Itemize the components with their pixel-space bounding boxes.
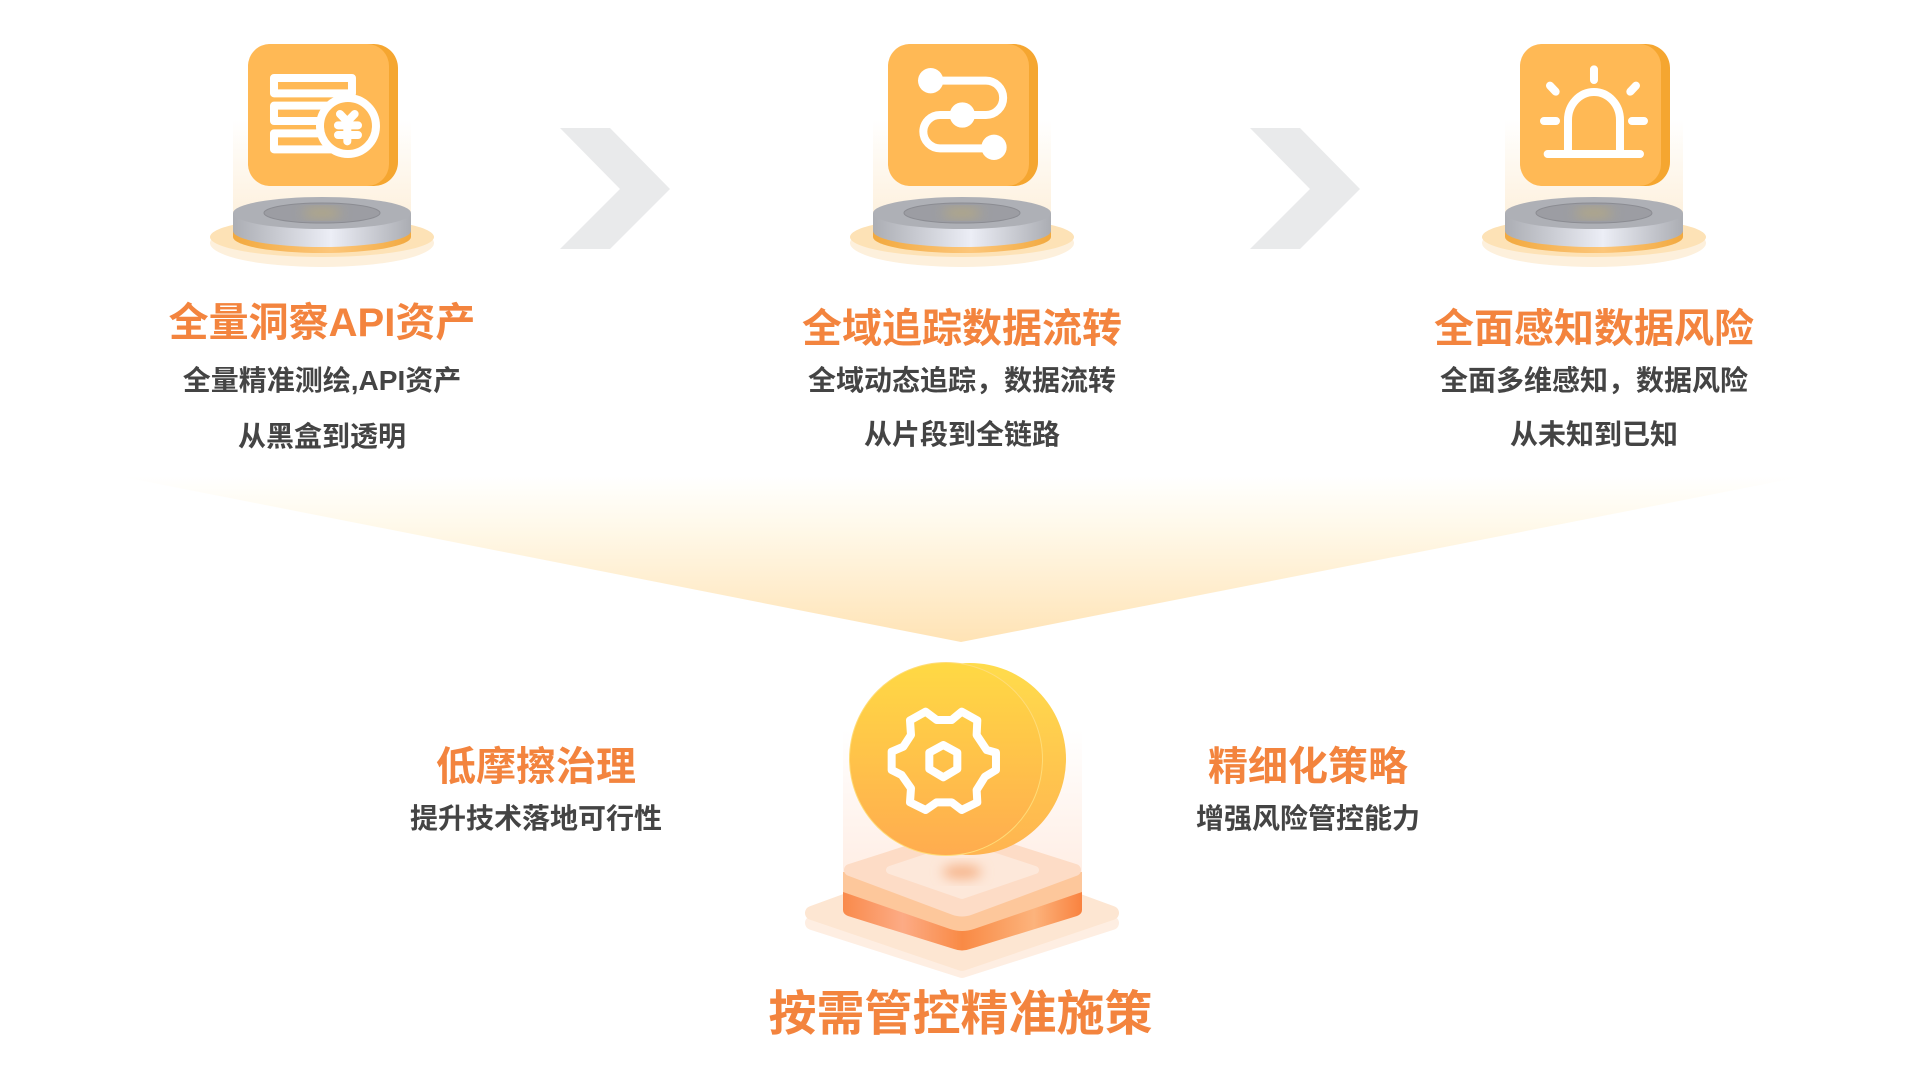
arrow 2 <box>1250 128 1360 249</box>
fan gradient <box>118 476 1806 642</box>
description: 从片段到全链路 <box>864 419 1060 450</box>
description <box>183 365 461 452</box>
description <box>1440 365 1748 450</box>
description: 全域动态追踪，数据流转 <box>808 365 1116 396</box>
icon: flow path <box>850 44 1074 267</box>
left benefit <box>410 745 662 834</box>
heading: 全面感知数据风险 <box>1434 307 1754 351</box>
icon: ledger with yen coin <box>210 44 434 267</box>
heading: 精细化策略 <box>1208 745 1408 789</box>
stage 1: API assets <box>169 44 475 452</box>
coin <box>849 662 1066 856</box>
heading: 低摩擦治理 <box>436 745 636 789</box>
description: 全面多维感知，数据风险 <box>1440 365 1748 396</box>
description: 从黑盒到透明 <box>238 421 406 452</box>
stage 3: data risk <box>1434 44 1754 450</box>
icon: alarm light <box>1482 44 1706 267</box>
heading: 全域追踪数据流转 <box>802 307 1122 351</box>
platform <box>812 730 1112 971</box>
description: 增强风险管控能力 <box>1196 803 1420 834</box>
right benefit <box>1196 745 1420 834</box>
central icon: gear coin on platform <box>812 662 1112 971</box>
gear <box>892 712 996 810</box>
description: 提升技术落地可行性 <box>410 803 662 834</box>
heading: 全量洞察API资产 <box>169 301 475 345</box>
stage 2: data flow <box>802 44 1122 450</box>
description: 全量精准测绘,API资产 <box>183 365 461 396</box>
main title: 按需管控精准施策 <box>768 988 1153 1041</box>
description <box>808 365 1116 450</box>
description: 从未知到已知 <box>1510 419 1678 450</box>
arrow 1 <box>560 128 670 249</box>
